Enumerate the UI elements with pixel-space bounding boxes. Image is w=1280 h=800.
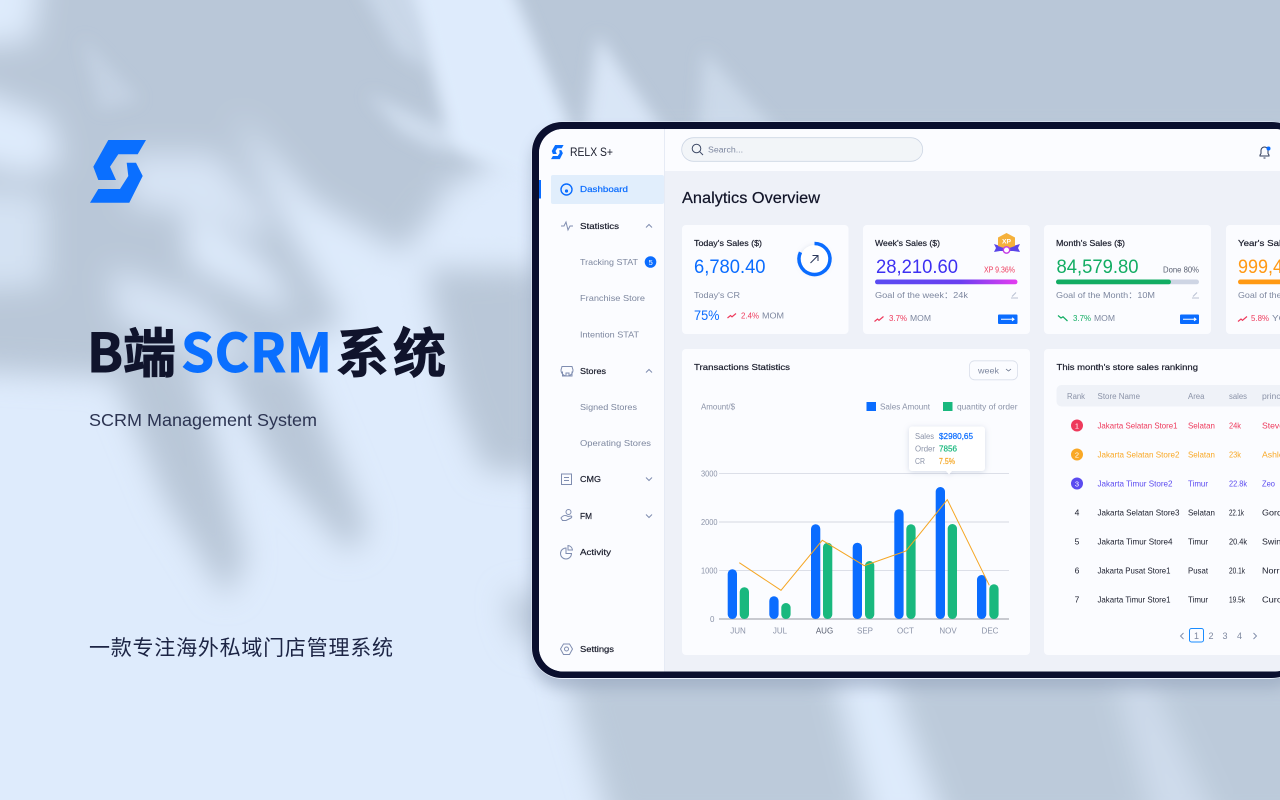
brand: small logo and name: RELX S+ [570, 147, 613, 159]
arrow button [1180, 314, 1199, 324]
row 5 [1075, 536, 1280, 546]
bar chart: 0 [710, 615, 715, 624]
title: SCRM [181, 312, 332, 388]
icon: XP badge: XP [1002, 238, 1012, 246]
tooltip: 7.5% [939, 457, 955, 466]
panel: week's sales: Goal of the week：24k [875, 290, 969, 300]
search box [682, 138, 923, 161]
trend: up [727, 312, 784, 318]
table header: Rank [1067, 392, 1086, 401]
trend: up: MOM [762, 310, 784, 320]
month labels: JUL [773, 626, 788, 636]
panel: today's sales: Today's Sales ($) [694, 238, 762, 248]
panel: transactions statistics: Transactions Statistics [694, 362, 790, 372]
row 6 [1075, 566, 1280, 576]
row 2: 23k [1229, 450, 1242, 460]
month labels: NOV [939, 626, 957, 636]
title: 端 [123, 312, 176, 388]
brand: small logo and name [551, 145, 613, 159]
nav: settings: Settings [580, 644, 614, 654]
panel: today's sales: 75% [694, 307, 720, 323]
panel: week's sales: 28,210.60 [876, 256, 958, 278]
row 1 [1071, 420, 1280, 432]
panel: week's sales [863, 225, 1030, 334]
nav: tracking stat with badge: Tracking STAT [580, 257, 638, 267]
icon: edit [1192, 292, 1199, 298]
legend: Sales Amount [880, 402, 931, 412]
nav: activity: Activity [580, 547, 612, 557]
row 3 [1071, 478, 1275, 490]
row 6: 20.1k [1229, 566, 1246, 576]
nav: statistics [561, 221, 652, 231]
trend: down [1058, 315, 1114, 322]
row 7: 19.5k [1229, 594, 1246, 604]
icon: XP badge [994, 233, 1020, 253]
trend: up: 2.4% [741, 310, 759, 320]
row 2: Jakarta Selatan Store2 [1098, 450, 1180, 460]
title: 统 [393, 312, 446, 388]
bar chart: 3000 [701, 470, 718, 478]
row 5: 5 [1075, 536, 1080, 546]
panel: store sales ranking [1044, 349, 1280, 655]
nav: fm: FM [580, 511, 592, 521]
row 1: 24k [1229, 420, 1242, 430]
trend: down: MOM [1094, 313, 1115, 323]
legend [866, 402, 1018, 412]
month labels: JUN [730, 626, 746, 636]
icon: progress ring [799, 244, 830, 274]
nav: activity [560, 546, 612, 559]
nav: cmg [562, 474, 652, 484]
nav: cmg: CMG [580, 474, 601, 484]
row 5: 20.4k [1229, 536, 1248, 546]
line: conversion rate [739, 500, 989, 590]
logo: large S mark [90, 140, 146, 203]
tooltip: Order [915, 444, 935, 454]
icon: notification bell [1260, 146, 1270, 158]
row 4: 4 [1075, 508, 1080, 518]
row 6: Pusat [1188, 566, 1209, 576]
row 7: Curo [1262, 594, 1280, 604]
tooltip: CR [915, 457, 925, 466]
row 2 [1071, 448, 1280, 460]
green bars: quantity of order [740, 524, 999, 619]
pagination: 4 [1237, 631, 1242, 641]
subtitle: SCRM Management System [89, 410, 317, 430]
panel: today's sales: Today's CR [694, 290, 740, 300]
nav: dashboard active: Dashboard [580, 184, 628, 194]
month labels: OCT [897, 626, 914, 636]
bar chart: 2000 [701, 518, 718, 527]
tooltip: $2980,65 [939, 432, 974, 441]
month labels [730, 626, 999, 636]
nav: dashboard active [539, 175, 664, 204]
nav: signed stores: Signed Stores [580, 402, 637, 412]
row 1: 1 [1075, 422, 1079, 430]
panel: today's sales: 6,780.40 [694, 256, 766, 278]
legend: quantity of order [957, 402, 1018, 412]
progress bar [1056, 280, 1199, 284]
icon: edit [1011, 292, 1018, 298]
nav: statistics: Statistics [580, 221, 619, 231]
row 3: 3 [1075, 480, 1079, 488]
panel: transactions statistics: Amount/$ [701, 402, 736, 412]
trend: up: 3.7% [889, 313, 907, 323]
nav: stores [561, 366, 652, 376]
tooltip: Sales [915, 432, 934, 441]
row 1: Jakarta Selatan Store1 [1098, 420, 1178, 430]
panel: year's sales: 5.8% [1251, 313, 1269, 323]
tooltip [909, 426, 985, 474]
panel: month's sales: Done 80% [1163, 266, 1199, 274]
panel: month's sales: 84,579.80 [1056, 256, 1139, 278]
row 3: Jakarta Timur Store2 [1098, 478, 1173, 488]
dropdown: week [970, 361, 1018, 380]
search box: Search... [708, 146, 743, 154]
row 6: Jakarta Pusat Store1 [1098, 566, 1171, 576]
row 3: Zeo [1262, 478, 1275, 488]
title: 系 [336, 312, 389, 388]
month labels: AUG [816, 626, 833, 636]
row 5: Jakarta Timur Store4 [1098, 536, 1173, 546]
panel: year's sales [1226, 225, 1280, 334]
panel: store sales ranking: This month's store sales rankinng [1056, 362, 1198, 372]
nav: intention stat: Intention STAT [580, 330, 639, 340]
row 4: 22.1k [1229, 508, 1245, 518]
blue bars: sales amount [728, 487, 986, 619]
month labels: DEC [982, 626, 999, 636]
page heading: Analytics Overview [682, 190, 821, 207]
nav: franchise store: Franchise Store [580, 293, 645, 303]
month labels: SEP [857, 626, 873, 636]
bar chart: 1000 [701, 566, 718, 576]
row 2: Selatan [1188, 450, 1215, 460]
pagination: 2 [1208, 631, 1214, 641]
progress bar [875, 280, 1018, 284]
panel: month's sales: Month's Sales ($) [1056, 238, 1125, 248]
row 6: 6 [1075, 566, 1080, 576]
pagination: 3 [1222, 631, 1228, 641]
nav: fm [561, 510, 652, 521]
row 1: Selatan [1188, 420, 1215, 430]
nav: tracking stat with badge [580, 256, 656, 268]
panel: today's sales [682, 225, 848, 334]
table header [1056, 385, 1280, 406]
panel: month's sales [1044, 225, 1211, 334]
nav: stores: Stores [580, 366, 606, 376]
nav: settings [560, 644, 614, 654]
row 3: Timur [1188, 478, 1208, 488]
nav: tracking stat with badge: 5 [649, 258, 653, 267]
row 5: Timur [1188, 536, 1208, 546]
table header: sales [1229, 392, 1247, 401]
row 7 [1075, 594, 1280, 604]
tagline: 一款专注海外私域门店管理系统 [89, 637, 393, 660]
pagination: 1 [1194, 631, 1199, 641]
trend: down: 3.7% [1073, 313, 1091, 323]
row 4 [1075, 508, 1280, 518]
panel: week's sales: Week's Sales ($) [875, 238, 940, 248]
panel: month's sales: Goal of the Month：10M [1056, 290, 1155, 300]
panel: top bar [665, 129, 1280, 171]
row 4: Jakarta Selatan Store3 [1098, 508, 1180, 518]
table header: Area [1188, 392, 1205, 401]
tooltip: 7856 [939, 444, 958, 454]
dashboard device mockup [532, 122, 1280, 688]
row 3: 22.8k [1229, 478, 1248, 488]
row 7: 7 [1075, 594, 1080, 604]
nav: operating stores: Operating Stores [580, 438, 651, 448]
arrow button [998, 314, 1018, 324]
bar chart [701, 470, 1009, 636]
title: B [87, 312, 123, 388]
table header: Store Name [1098, 392, 1141, 401]
row 2: 2 [1075, 450, 1079, 460]
panel: sidebar [539, 129, 665, 672]
row 7: Jakarta Timur Store1 [1098, 594, 1171, 604]
row 4: Selatan [1188, 508, 1215, 518]
row 7: Timur [1188, 594, 1208, 604]
trend: up: MOM [910, 313, 931, 323]
trend: up [874, 315, 930, 322]
dropdown: week: week [977, 366, 1000, 376]
pagination [1180, 628, 1256, 642]
panel: transactions statistics [682, 349, 1030, 655]
panel: week's sales: XP 9.36% [984, 266, 1015, 274]
